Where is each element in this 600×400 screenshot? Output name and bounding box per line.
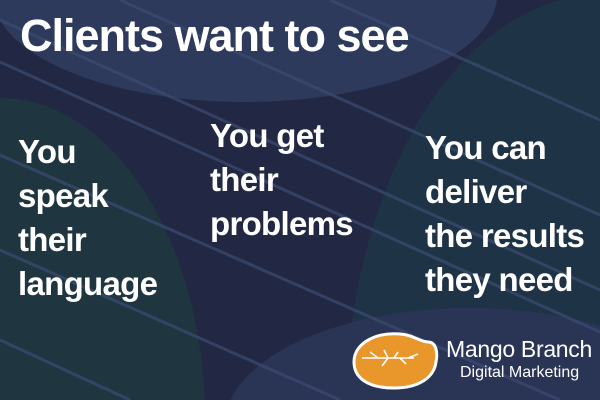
column 1 text <box>18 133 157 302</box>
column 2 text: their <box>210 161 278 198</box>
title: Clients want to see <box>20 10 409 61</box>
brand name: Mango Branch <box>446 336 592 362</box>
column 2 text: You get <box>210 117 324 154</box>
column 1 text: You <box>18 133 76 170</box>
icon: mango <box>352 332 438 390</box>
column 3 text: they need <box>425 261 573 298</box>
column 3 text <box>425 129 584 298</box>
column 1 text: speak <box>18 177 108 214</box>
logo <box>352 332 592 390</box>
column 3 text: the results <box>425 217 584 254</box>
column 1 text: language <box>18 265 157 302</box>
column 3 text: deliver <box>425 173 526 210</box>
column 2 text <box>210 117 353 242</box>
column 1 text: their <box>18 221 86 258</box>
column 2 text: problems <box>210 205 353 242</box>
tagline: Digital Marketing <box>460 364 579 381</box>
column 3 text: You can <box>425 129 546 166</box>
